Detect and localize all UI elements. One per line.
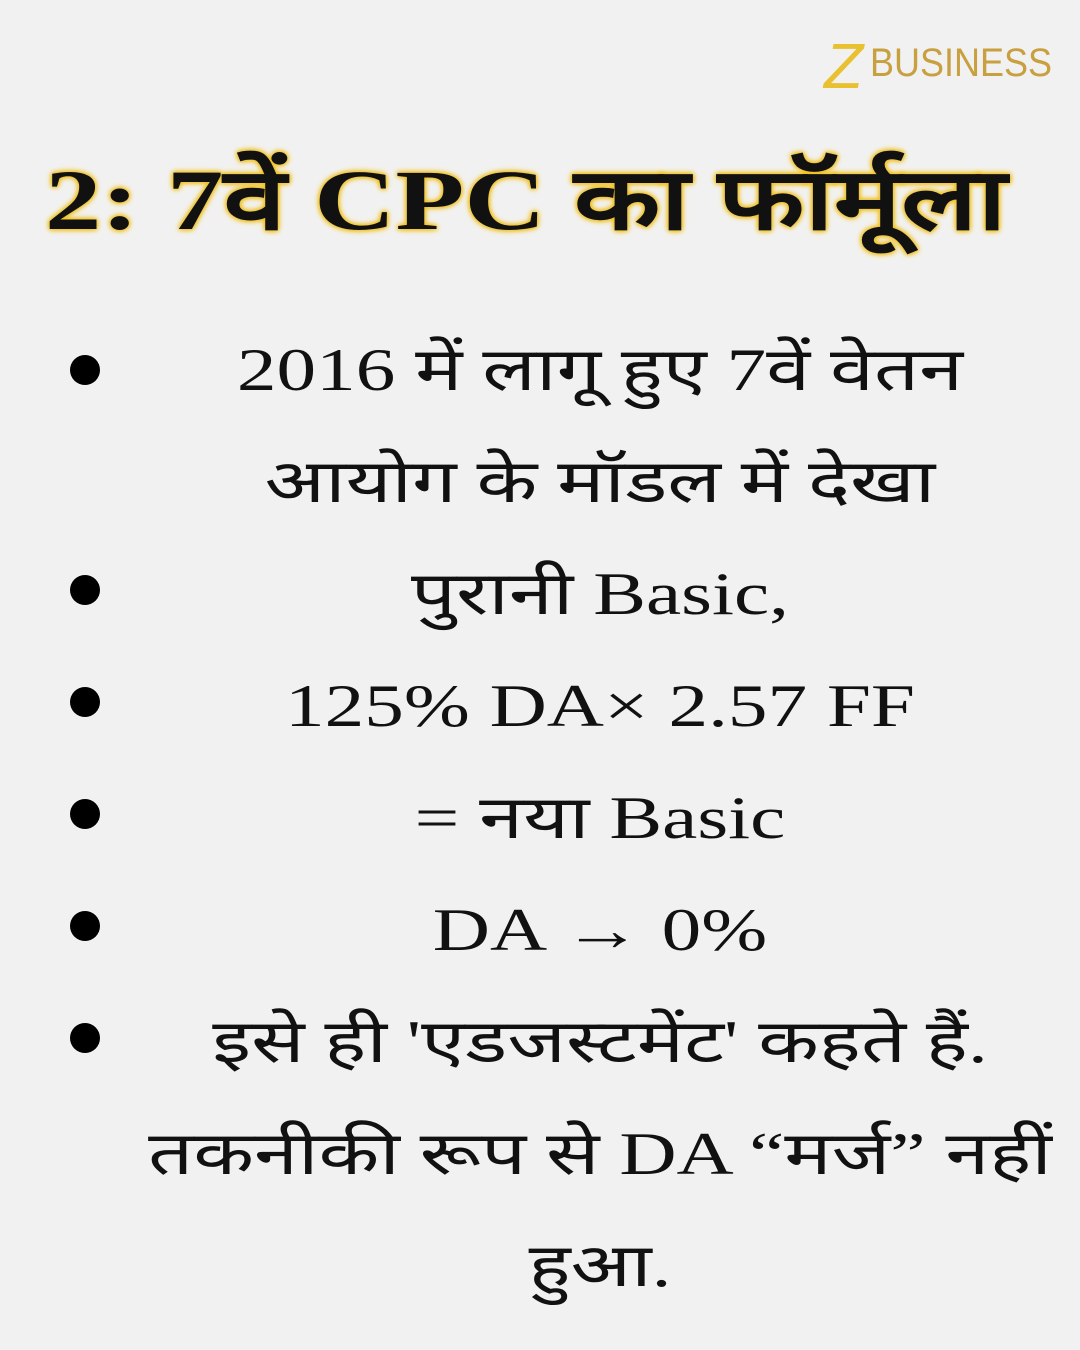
text: adjustment: इसे ही 'एडजस्टमेंट' कहते हैं. bbox=[212, 1009, 988, 1075]
title: 2: 7वें CPC का फॉर्मूला bbox=[45, 152, 1007, 248]
bullet 3 bbox=[70, 687, 100, 717]
text: line 2: आयोग के मॉडल में देखा bbox=[265, 449, 935, 515]
bullet 6 bbox=[70, 1023, 100, 1053]
bullet list bbox=[70, 336, 1053, 1305]
logo: Z Business bbox=[822, 30, 1052, 98]
text: old basic: पुरानी Basic, bbox=[411, 561, 789, 627]
text: line 1: 2016 में लागू हुए 7वें वेतन bbox=[237, 337, 963, 403]
text: formula: 125% DA× 2.57 FF bbox=[285, 673, 915, 739]
text: DA to 0: DA → 0% bbox=[433, 897, 767, 963]
text: end: हुआ. bbox=[529, 1233, 671, 1299]
bullet 5 bbox=[70, 911, 100, 941]
bullet 1 bbox=[70, 355, 100, 385]
bullet 2 bbox=[70, 575, 100, 605]
text: technical: तकनीकी रूप से DA “मर्ज” नहीं bbox=[148, 1121, 1052, 1187]
bullet 4 bbox=[70, 799, 100, 829]
text: new basic: = नया Basic bbox=[415, 785, 785, 851]
